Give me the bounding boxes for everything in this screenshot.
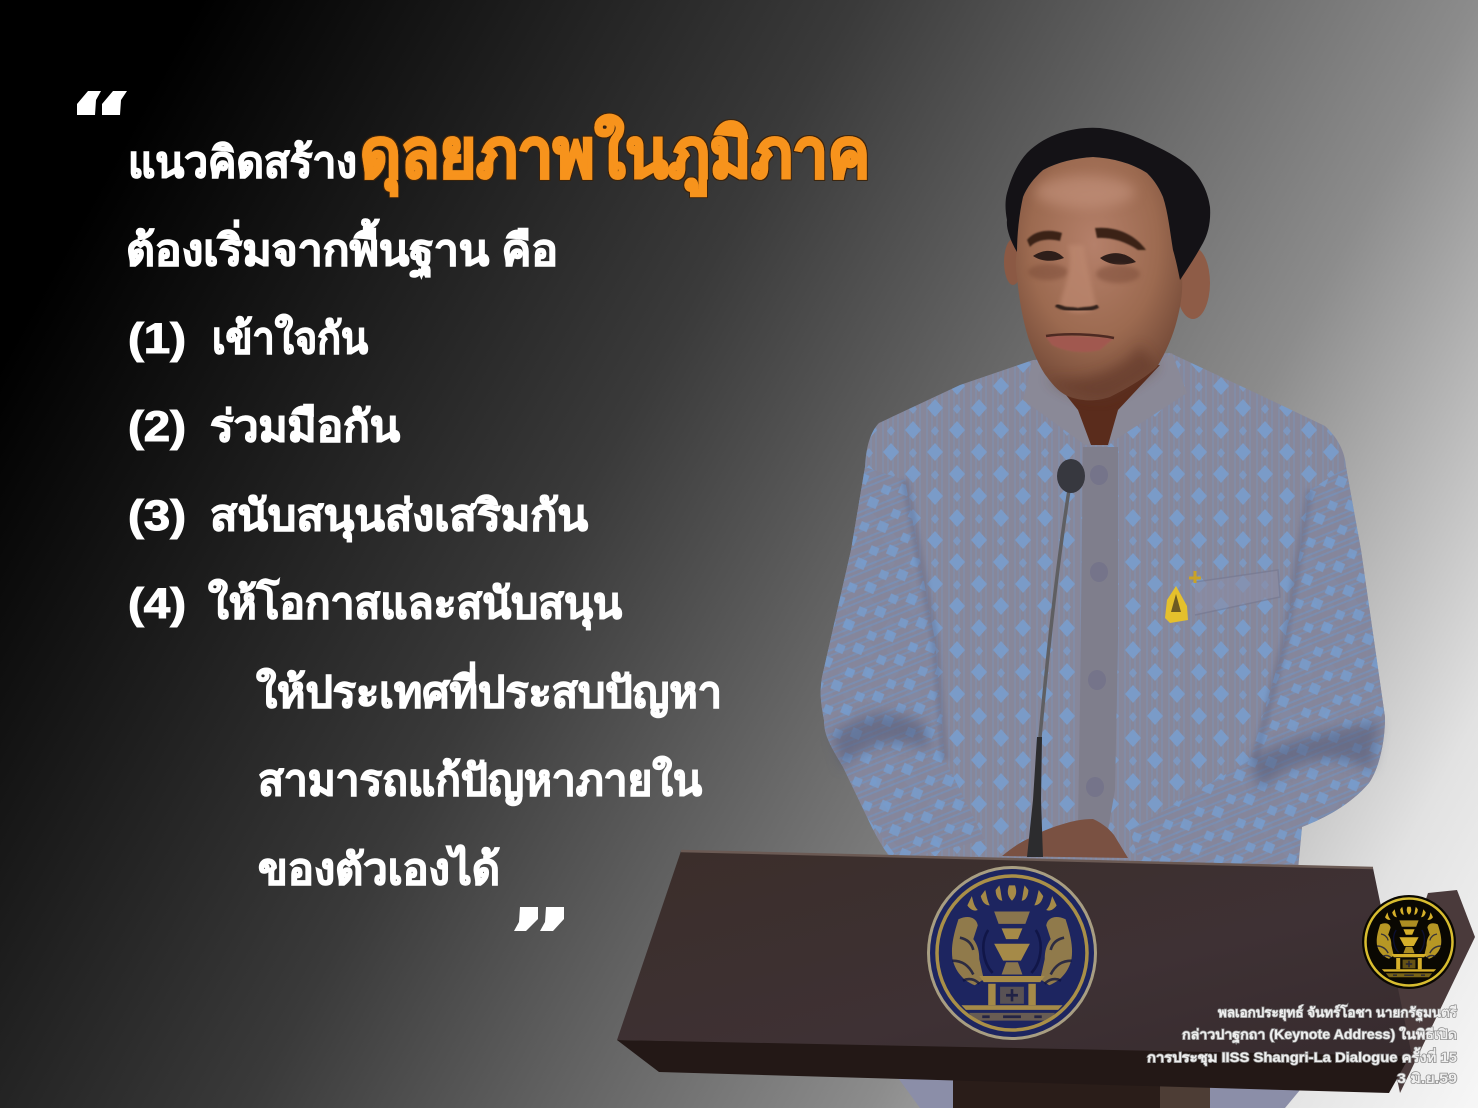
microphone (1027, 459, 1085, 857)
jacket buttons (1086, 465, 1108, 797)
item 2: (2) (128, 403, 186, 451)
jacket lower part under lectern (885, 1060, 1325, 1108)
hair (1006, 128, 1210, 280)
item 2: ร่วมมือกัน (210, 403, 401, 451)
quote text (126, 114, 870, 894)
facial features (1027, 176, 1157, 398)
caption line 4: 3 มิ.ย.59 (1397, 1071, 1457, 1086)
caption line 1: พลเอกประยุทธ์ จันทร์โอชา นายกรัฐมนตรี (1218, 1003, 1458, 1022)
item 4 continued line 1: ให้ประเทศที่ประสบปัญหา (256, 662, 722, 718)
item 4 continued line 2: สามารถแก้ปัญหาภายใน (258, 755, 703, 806)
jacket with woven pattern (821, 353, 1385, 870)
item 3: (3) (128, 492, 186, 540)
line 2: ต้องเริ่มจากพื้นฐาน คือ (126, 218, 558, 278)
line 1 white: แนวคิดสร้าง (128, 139, 357, 187)
icon: gold pin (1165, 571, 1201, 623)
portrait: speaker at lectern (821, 128, 1385, 1108)
item 1: (1) (128, 315, 186, 363)
quotation mark close (514, 907, 564, 931)
lectern side wing (1385, 890, 1475, 1093)
caption line 3: การประชุม IISS Shangri-La Dialogue ครั้งที่ 15 (1147, 1047, 1458, 1066)
item 3: สนับสนุนส่งเสริมกัน (210, 492, 589, 543)
emblem on lectern (927, 866, 1097, 1040)
lectern pedestal (953, 1070, 1160, 1108)
item 4: (4) (128, 580, 186, 628)
neck (1050, 365, 1160, 445)
ear left (1004, 239, 1022, 285)
item 1 (128, 313, 369, 363)
item 1: เข้าใจกัน (212, 313, 369, 363)
lectern underside band (617, 1040, 1412, 1093)
lectern top edge (681, 851, 1373, 868)
item 4 continued line 3: ของตัวเองได้ (258, 844, 500, 894)
lectern (617, 851, 1475, 1108)
hands (1002, 819, 1128, 858)
seal logo (1362, 895, 1456, 989)
face (1016, 157, 1182, 400)
caption line 2: กล่าวปาฐกถา (Keynote Address) ในพิธีเปิด (1182, 1026, 1457, 1044)
jacket placket (1078, 447, 1118, 830)
attribution caption (1147, 1003, 1458, 1086)
heading orange: ดุลยภาพในภูมิภาค (360, 114, 870, 197)
item 2 (128, 403, 401, 451)
item 4: ให้โอกาสและสนับสนุน (208, 577, 623, 631)
collar (1023, 353, 1187, 445)
quotation mark open (77, 91, 127, 115)
ear right (1176, 247, 1210, 319)
shirt pocket (1195, 570, 1280, 615)
lectern front (617, 851, 1412, 1056)
